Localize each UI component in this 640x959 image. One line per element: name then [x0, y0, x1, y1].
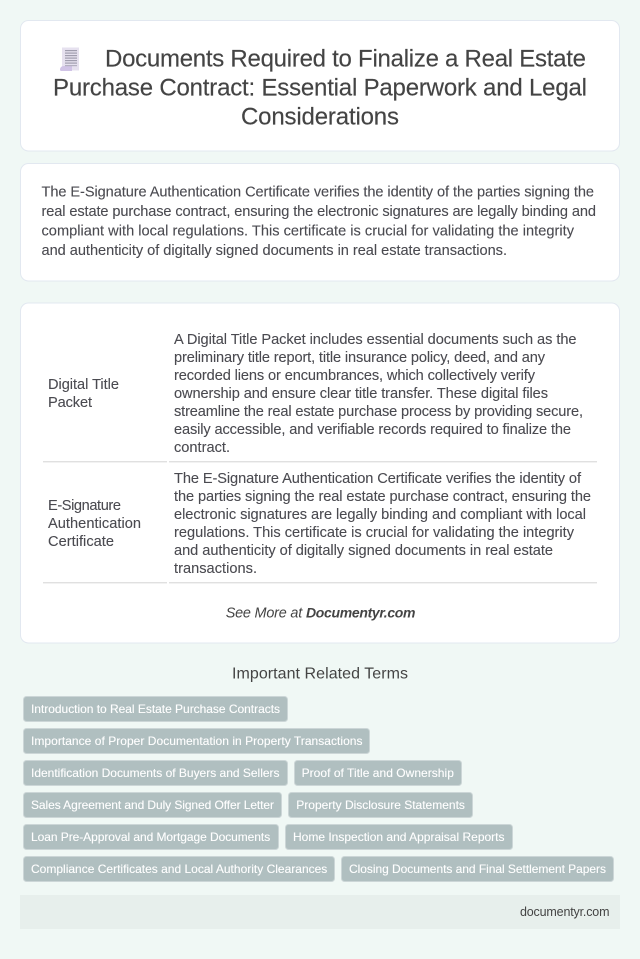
footer bar: [20, 895, 620, 929]
tag: Closing Documents and Final Settlement Papers: [349, 862, 606, 876]
description: Digital Title Packet: ownership and ensure clear title transfer. These digital files: [174, 386, 548, 402]
term: Digital Title Packet: Digital Title: [48, 377, 119, 393]
tag: Identification Documents of Buyers and Sellers: [31, 766, 280, 780]
footer bar: documentyr.com: [520, 905, 610, 919]
term: Digital Title Packet: [48, 377, 119, 411]
table row: Digital Title Packet: [48, 332, 583, 456]
tag: [24, 696, 288, 722]
term: E-Signature Authentication Certificate: Certificate: [48, 534, 114, 550]
tag: [288, 792, 472, 818]
tag: Property Disclosure Statements: [296, 798, 465, 812]
tag: [24, 760, 288, 786]
summary text: real estate purchase contract, ensuring the electronic signatures are legally binding and: [42, 204, 596, 220]
tag: [286, 824, 512, 850]
term: E-Signature Authentication Certificate: Authentication: [48, 516, 141, 532]
heading: important related terms: Important Related Terms: [232, 666, 408, 682]
description: Digital Title Packet: easily accessible, and verifiable records required to finalize the: [174, 422, 571, 438]
description: Digital Title Packet: streamline the real estate purchase process by providing secure,: [174, 404, 583, 420]
description: Digital Title Packet: A Digital Title Packet includes essential documents such as the: [174, 332, 576, 348]
description: E-Signature Authentication Certificate: The E-Signature Authentication Certificate verifies the identity of: [174, 471, 582, 487]
tag: Sales Agreement and Duly Signed Offer Letter: [31, 798, 274, 812]
tag: [24, 792, 282, 818]
panel: document table: [20, 303, 620, 643]
description: E-Signature Authentication Certificate: [174, 471, 591, 577]
see more link: Documentyr.com: [306, 604, 416, 620]
description: E-Signature Authentication Certificate: transactions.: [174, 561, 257, 577]
summary text: compliant with local regulations. This certificate is crucial for validating the integrity: [42, 224, 575, 240]
tag: Home Inspection and Appraisal Reports: [293, 830, 504, 844]
description: E-Signature Authentication Certificate: and authenticity of digitally signed documents in real estate: [174, 543, 553, 559]
tag: Loan Pre-Approval and Mortgage Documents: [31, 830, 270, 844]
description: Digital Title Packet: recorded liens or encumbrances, which collectively verify: [174, 368, 536, 384]
tag: [24, 728, 370, 754]
table row: E-Signature Authentication Certificate: [48, 471, 591, 577]
related terms tags: [24, 696, 614, 882]
tag: Introduction to Real Estate Purchase Contracts: [31, 702, 280, 716]
see more link: [226, 604, 416, 622]
panel: title card: [20, 20, 620, 151]
title: Documents Required to Finalize a Real Estate: [105, 46, 586, 72]
icon: document scroll: [60, 48, 79, 71]
summary text: [42, 184, 596, 259]
description: E-Signature Authentication Certificate: electronic signatures are legally binding and compliant with local: [174, 507, 586, 523]
summary text: The E-Signature Authentication Certificate verifies the identity of the parties signing the: [42, 184, 594, 200]
tag: Proof of Title and Ownership: [302, 766, 454, 780]
title: Purchase Contract: Essential Paperwork and Legal: [53, 74, 587, 102]
panel: summary paragraph: [20, 164, 620, 281]
term: E-Signature Authentication Certificate: E-Signature: [48, 498, 121, 514]
tag: [294, 760, 462, 786]
term: Digital Title Packet: Packet: [48, 395, 92, 411]
see more link: See More at: [226, 606, 303, 622]
tag: [24, 856, 334, 882]
description: Digital Title Packet: preliminary title report, title insurance policy, deed, and any: [174, 350, 546, 366]
title: [53, 46, 587, 130]
tag: Compliance Certificates and Local Authority Clearances: [31, 862, 327, 876]
tag: [342, 856, 614, 882]
description: Digital Title Packet: contract.: [174, 440, 230, 456]
term: E-Signature Authentication Certificate: [48, 498, 141, 550]
description: E-Signature Authentication Certificate: regulations. This certificate is crucial for validating the integrity: [174, 525, 575, 541]
description: E-Signature Authentication Certificate: the parties signing the real estate purchase contract, ensuring the: [174, 489, 591, 505]
title: Considerations: [241, 104, 399, 130]
tag: [24, 824, 278, 850]
tag: Importance of Proper Documentation in Property Transactions: [31, 734, 362, 748]
description: Digital Title Packet: [174, 332, 583, 456]
summary text: and authenticity of digitally signed documents in real estate transactions.: [42, 243, 507, 259]
